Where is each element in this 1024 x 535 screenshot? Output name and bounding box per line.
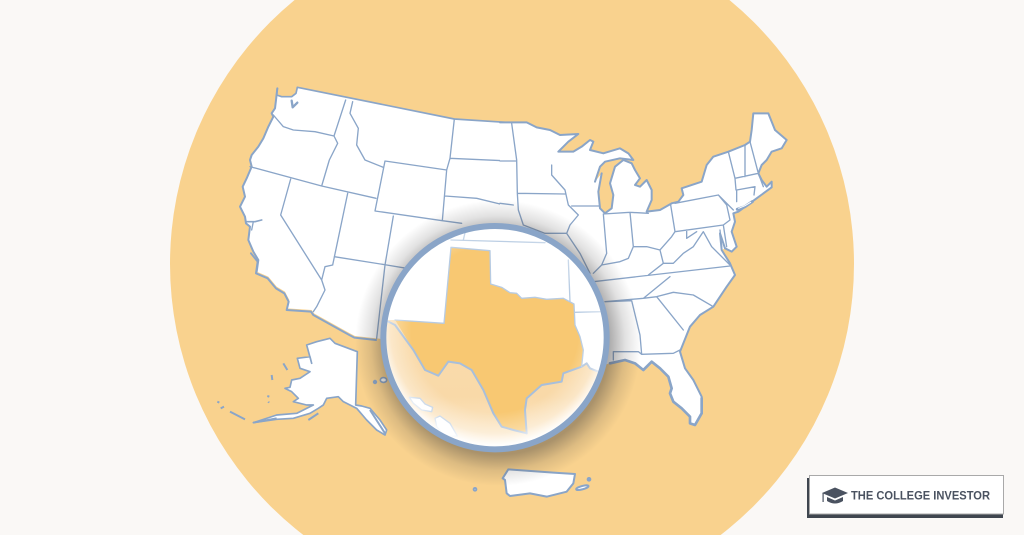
lens ring <box>383 226 607 449</box>
state of Texas <box>395 247 583 433</box>
western states <box>240 87 510 347</box>
Hawaii <box>374 378 387 383</box>
logo badge <box>807 476 1004 518</box>
icon: graduation cap <box>822 488 848 504</box>
Baja California islands <box>409 397 457 437</box>
badge shadow <box>807 478 1003 518</box>
badge box <box>810 476 1004 514</box>
Rio Grande and coastline <box>388 233 602 433</box>
map of the United States <box>217 87 787 497</box>
lens background <box>383 226 607 449</box>
lens contents <box>386 233 601 442</box>
Alaska <box>217 338 387 435</box>
eastern states <box>500 113 787 425</box>
brand name: THE COLLEGE INVESTOR <box>851 490 991 502</box>
orange background circle <box>170 0 854 535</box>
Puerto Rico <box>474 469 590 497</box>
magnifier shadow <box>355 200 641 486</box>
Mexico and Gulf of Mexico <box>386 320 598 442</box>
lens edge glow <box>383 226 607 449</box>
magnifying lens with Texas <box>380 226 610 460</box>
